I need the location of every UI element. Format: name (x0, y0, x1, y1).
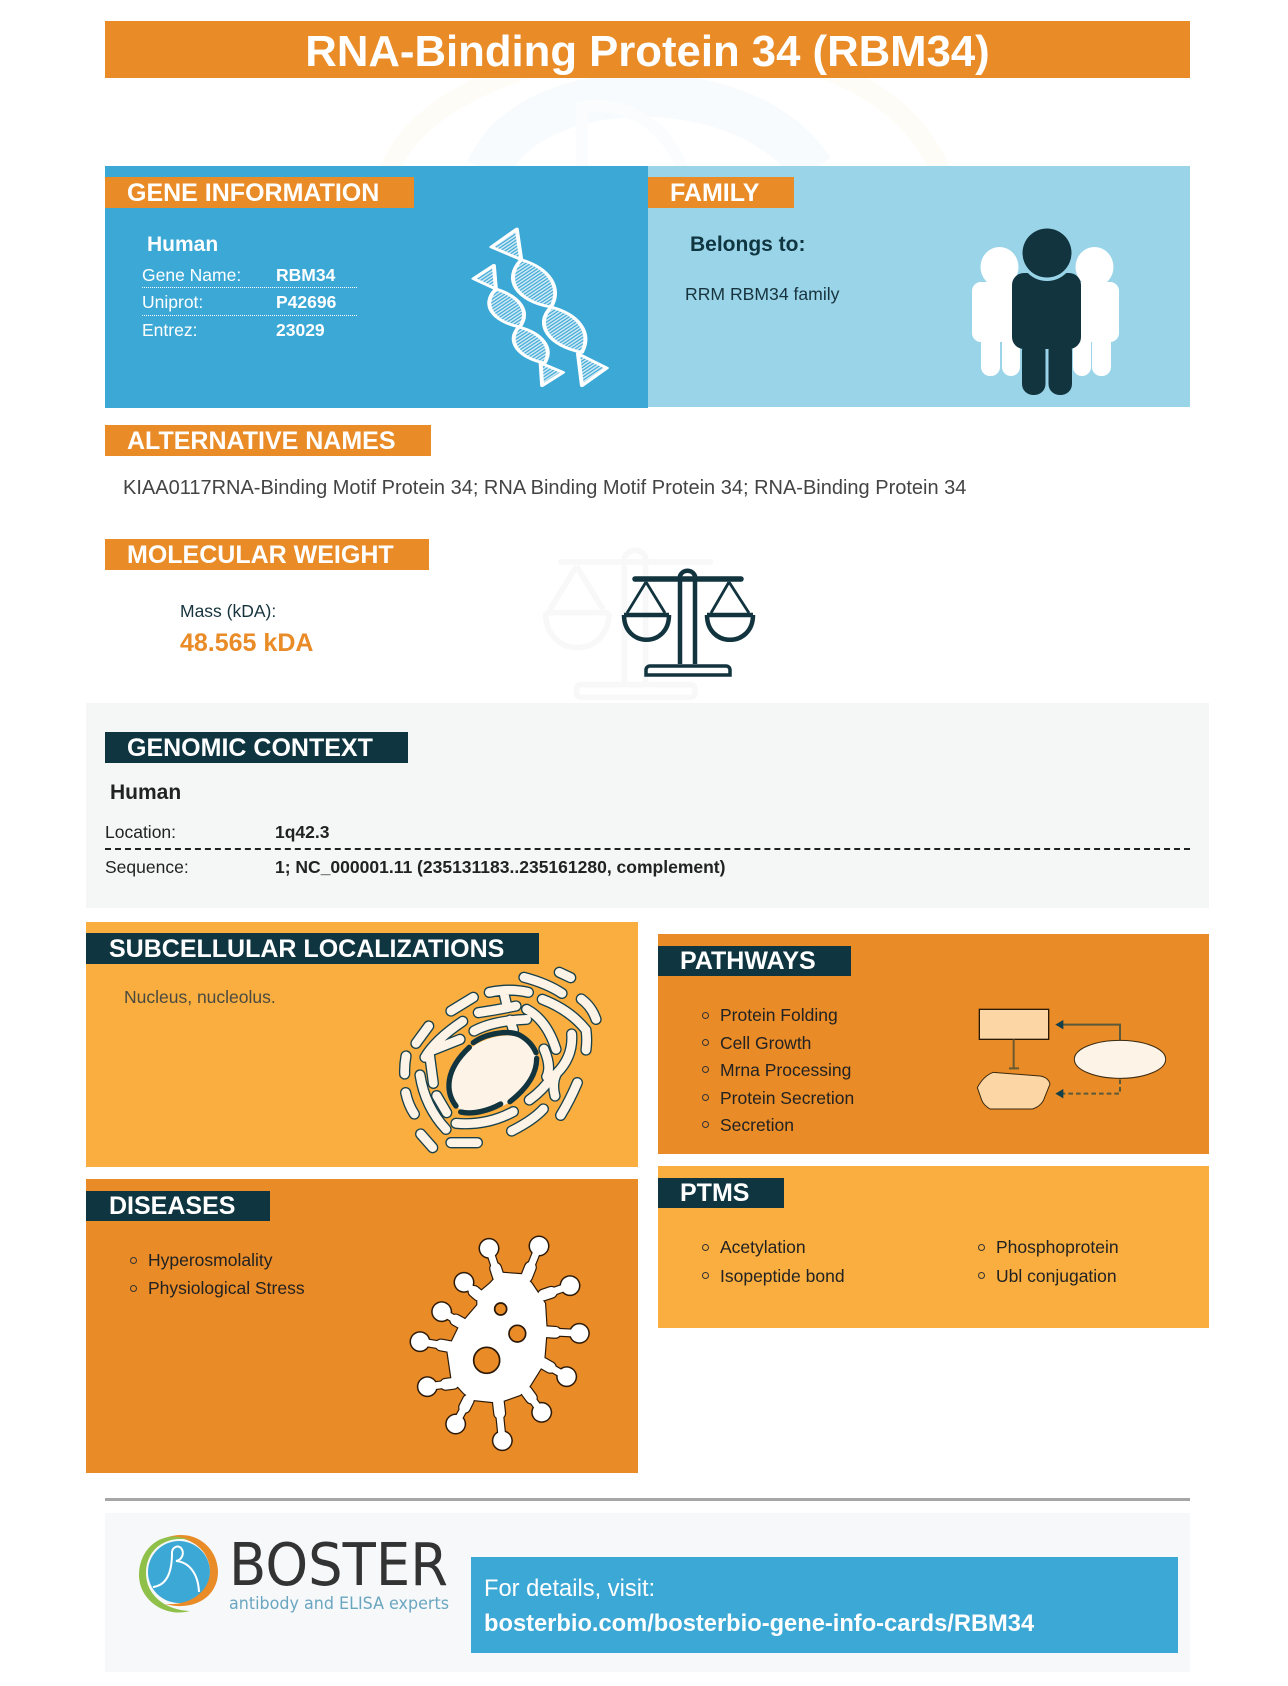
entrez row: Entrez: (142, 320, 197, 340)
icon: dna helices (471, 228, 609, 388)
icon: faint scales (530, 540, 770, 705)
panel: ptms (658, 1166, 1209, 1328)
species: human: Human (110, 781, 181, 804)
uniprot row: Uniprot: (142, 292, 203, 312)
panel: gene information (105, 166, 648, 408)
panel: family (648, 166, 1190, 407)
uniprot row (142, 288, 357, 316)
uniprot row: P42696 (276, 292, 336, 312)
mass label: Mass (kDA): (180, 601, 276, 621)
pathway list: Secretion (720, 1115, 794, 1135)
sequence row: 1; NC_000001.11 (235131183..235161280, complement) (275, 857, 725, 877)
footer divider (105, 1498, 1190, 1501)
boster logo: antibody and ELISA experts (229, 1594, 449, 1614)
heading: subcellular localizations: SUBCELLULAR LOCALIZATIONS (109, 935, 504, 963)
icon: pathway diagram (976, 1008, 1166, 1110)
panel: diseases (86, 1179, 638, 1473)
entrez row: 23029 (276, 320, 325, 340)
icon: cell organelles (398, 966, 602, 1154)
icon: scales (622, 568, 756, 677)
sequence row: Sequence: (105, 857, 189, 877)
ptm list column two: Ubl conjugation (996, 1266, 1117, 1286)
heading: molecular weight: MOLECULAR WEIGHT (127, 541, 394, 569)
heading: family (648, 177, 794, 208)
heading: ptms (658, 1178, 784, 1208)
panel: footer (105, 1513, 1190, 1672)
location row (105, 817, 1190, 850)
watermark logo (381, 78, 949, 166)
gene name row: Gene Name: (142, 265, 241, 285)
call to action box: For details, visit: (484, 1576, 655, 1602)
panel: subcellular localizations (86, 922, 638, 1167)
heading: gene information: GENE INFORMATION (127, 179, 379, 207)
ptm list column one: Acetylation (720, 1237, 806, 1257)
title: RNA-Binding Protein 34 (RBM34) (305, 27, 990, 76)
ptm list column one (702, 1237, 845, 1286)
pathway list: Protein Folding (720, 1005, 838, 1025)
ptm list column two (978, 1237, 1119, 1286)
gene name row: RBM34 (276, 265, 335, 285)
heading: alternative names: ALTERNATIVE NAMES (127, 427, 396, 455)
heading: family: FAMILY (670, 179, 759, 207)
heading: diseases (86, 1191, 270, 1221)
call to action box (471, 1557, 1178, 1653)
title (105, 21, 1190, 78)
belongs to label: Belongs to: (690, 233, 806, 256)
panel: pathways (658, 934, 1209, 1154)
family name: RRM RBM34 family (685, 284, 839, 304)
heading: pathways: PATHWAYS (680, 947, 816, 975)
species: human: Human (147, 233, 218, 256)
disease list: Hyperosmolality (148, 1250, 272, 1270)
disease list: Physiological Stress (148, 1278, 305, 1298)
icon: people (972, 228, 1119, 395)
pathway list: Cell Growth (720, 1033, 811, 1053)
pathway list: Mrna Processing (720, 1060, 851, 1080)
call to action box: bosterbio.com/bosterbio-gene-info-cards/RBM34 (484, 1611, 1034, 1637)
heading: ptms: PTMS (680, 1179, 749, 1207)
heading: genomic context: GENOMIC CONTEXT (127, 734, 373, 762)
gene name row (142, 260, 357, 288)
location row: 1q42.3 (275, 822, 329, 842)
icon: virus (409, 1235, 590, 1452)
panel: genomic context (86, 703, 1209, 908)
boster logo: BOSTER (229, 1530, 448, 1599)
pathway list (702, 1005, 854, 1135)
alternative names text: KIAA0117RNA-Binding Motif Protein 34; RNA Binding Motif Protein 34; RNA-Binding Protein 34 (123, 477, 966, 499)
localization text: Nucleus, nucleolus. (124, 987, 276, 1007)
location row: Location: (105, 822, 176, 842)
heading: diseases: DISEASES (109, 1192, 235, 1220)
entrez row (142, 320, 325, 340)
boster logo (139, 1530, 449, 1614)
heading: pathways (658, 946, 851, 976)
pathway list: Protein Secretion (720, 1088, 854, 1108)
mass value: 48.565 kDA (180, 629, 313, 657)
ptm list column one: Isopeptide bond (720, 1266, 845, 1286)
disease list (130, 1250, 305, 1298)
ptm list column two: Phosphoprotein (996, 1237, 1119, 1257)
